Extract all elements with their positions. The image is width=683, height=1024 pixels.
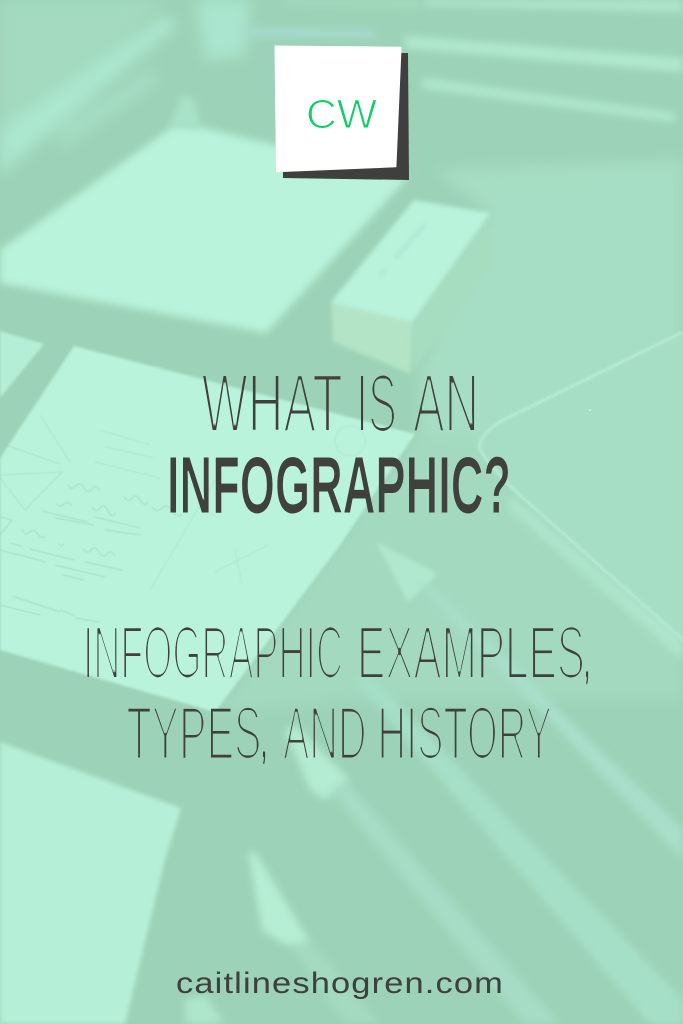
title line: WHAT IS AN: AN — [413, 357, 479, 450]
sketched wireframe marks — [0, 415, 365, 622]
subtitle line: INFOGRAPHIC EXAMPLES,: INFOGRAPHIC — [83, 611, 343, 695]
logo shadow — [283, 53, 409, 180]
background: arrow one — [355, 542, 683, 1024]
logo paper — [274, 46, 402, 172]
background: small paper corner — [0, 331, 44, 398]
logo letters CW: CW — [306, 91, 377, 137]
background: upper right streaks — [244, 0, 683, 122]
background: eraser block — [331, 200, 490, 374]
subtitle line: TYPES, AND HISTORY — [126, 691, 552, 775]
title line: WHAT IS AN: WHAT — [202, 357, 342, 450]
background: large notepad — [0, 125, 408, 333]
background: phone edge — [479, 332, 683, 640]
subtitle line: TYPES, AND HISTORY: , — [261, 711, 267, 769]
background: wireframe paper — [0, 346, 415, 712]
background: desk right side — [0, 0, 683, 715]
background: lower left sheet — [0, 742, 181, 1024]
website footer: caitlineshogren.com — [176, 967, 504, 1000]
background: arrow two — [285, 725, 560, 1024]
title line: WHAT IS AN: IS — [356, 357, 397, 450]
background: arrow three — [185, 852, 380, 1024]
logo card — [274, 46, 409, 180]
subtitle line: INFOGRAPHIC EXAMPLES,: , — [584, 631, 590, 689]
subtitle line: TYPES, AND HISTORY: TYPES — [126, 691, 262, 775]
